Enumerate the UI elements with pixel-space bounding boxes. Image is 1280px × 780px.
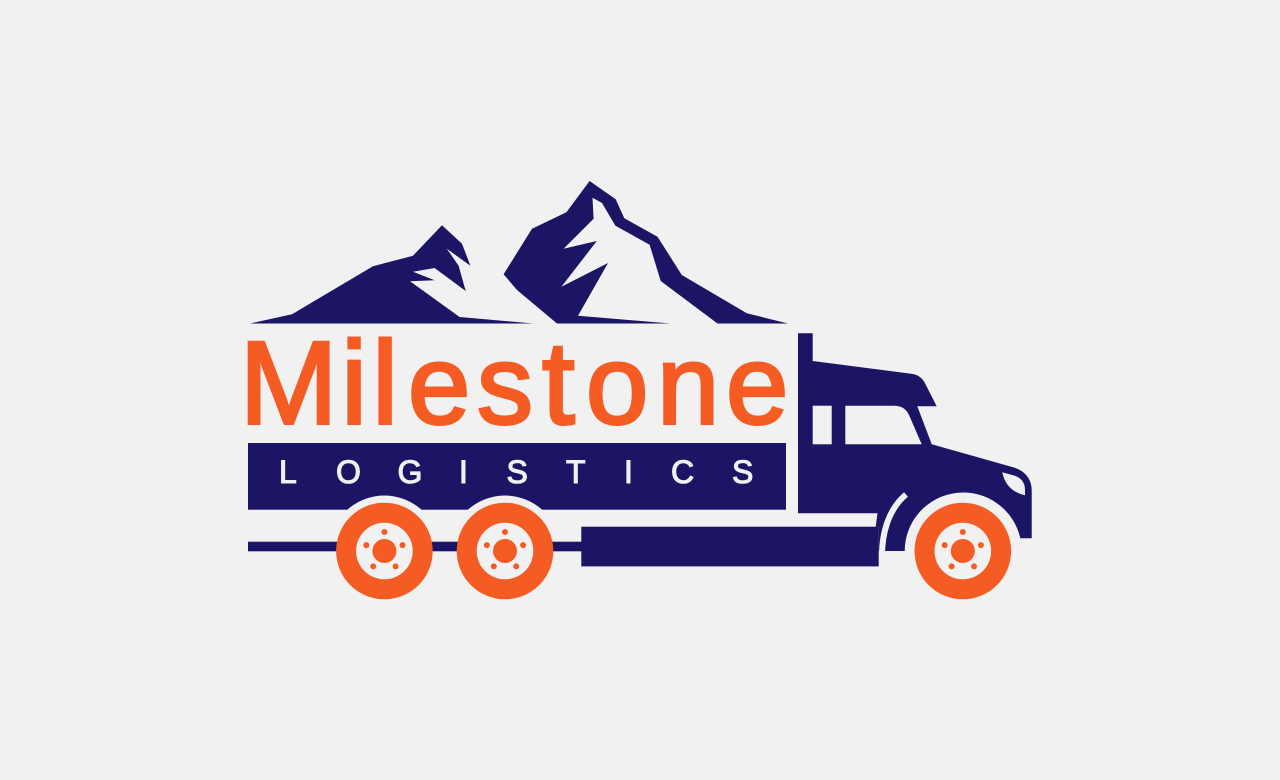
right mountain <box>504 181 788 324</box>
truck cab <box>798 333 1032 551</box>
wordmark: Milestone: n <box>657 322 719 448</box>
rear wheel 1 <box>336 503 433 599</box>
wordmark: Milestone: o <box>586 322 648 448</box>
front wheel <box>914 503 1011 599</box>
banner text: LOGISTICS <box>279 454 753 490</box>
cab rear window <box>813 406 832 444</box>
wordmark: Milestone: t <box>542 318 575 450</box>
fuel tank <box>581 527 879 566</box>
wordmark: Milestone: M <box>240 318 338 450</box>
fender gap <box>882 494 906 556</box>
mountains <box>250 181 788 324</box>
rear wheel 2 <box>457 503 553 599</box>
banner bar <box>248 443 786 510</box>
wordmark: Milestone: l <box>372 318 398 450</box>
trailer axle bar <box>248 542 588 551</box>
wordmark: Milestone: e <box>408 322 470 448</box>
wordmark: Milestone: i <box>341 318 367 450</box>
cab windshield <box>845 406 922 444</box>
headlight <box>1002 472 1025 495</box>
wordmark: Milestone: e <box>726 322 788 448</box>
wordmark: Milestone: s <box>477 322 533 448</box>
wheel arch cutouts <box>329 496 560 606</box>
left mountain <box>250 225 533 324</box>
banner: Logistics <box>248 443 786 510</box>
